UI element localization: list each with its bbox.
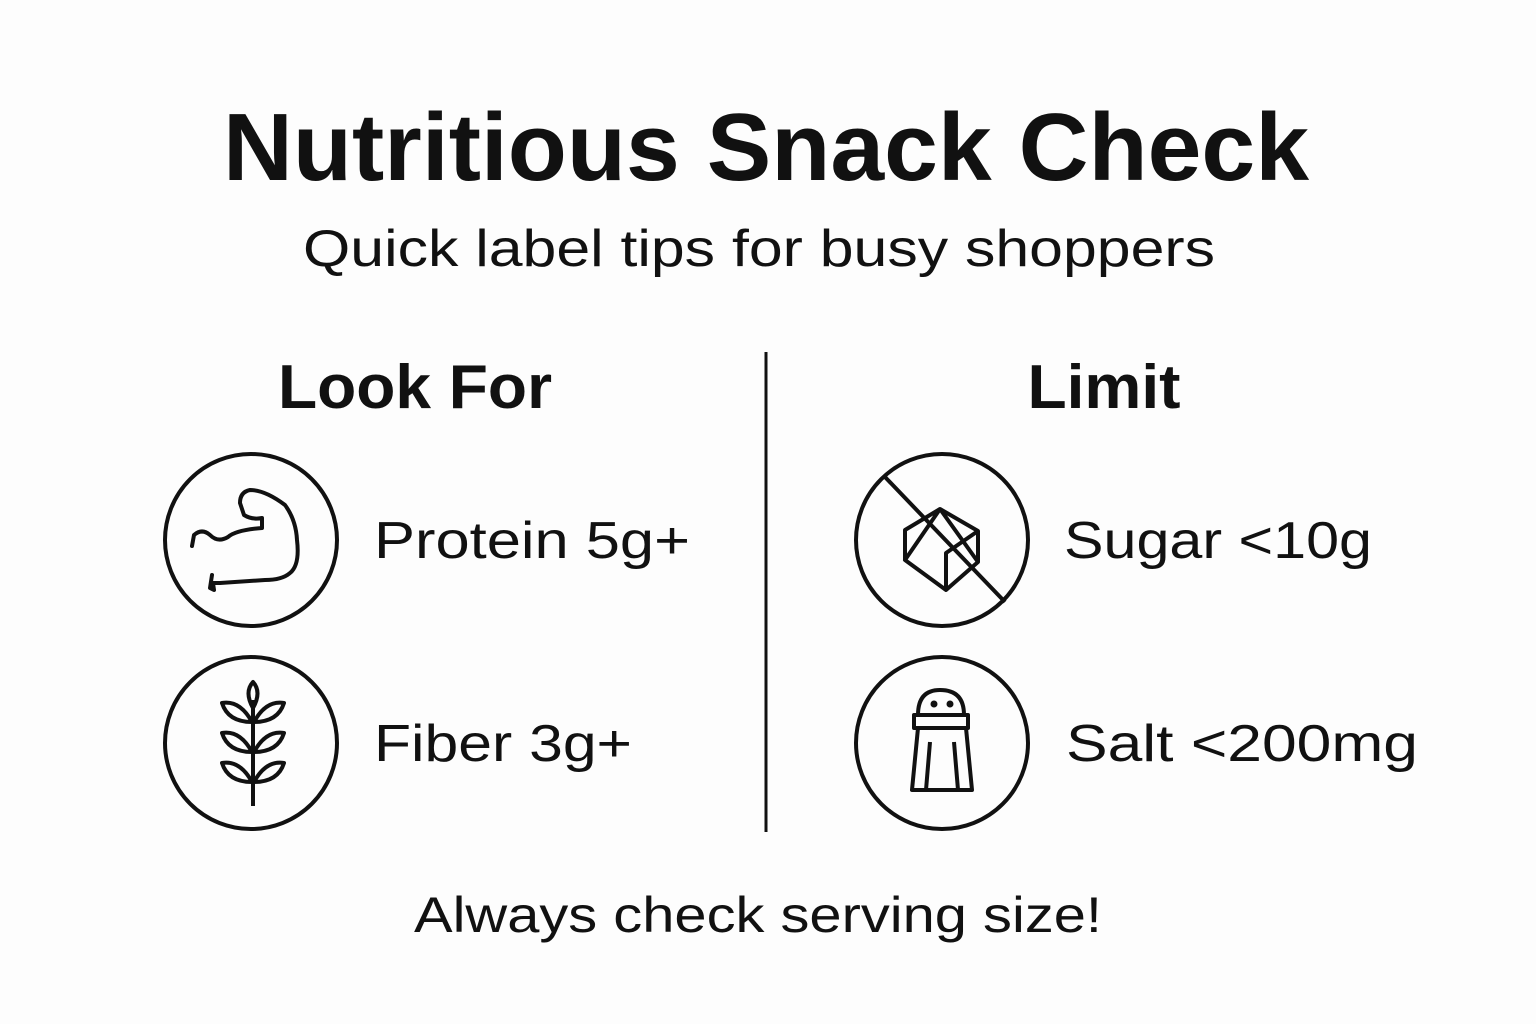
text: protein: Protein 5g+ (374, 512, 690, 570)
text: fiber: Fiber 3g+ (374, 715, 632, 773)
icon: no sugar cube (856, 454, 1028, 626)
subtitle: Quick label tips for busy shoppers (303, 220, 1215, 278)
icon: salt shaker (856, 657, 1028, 829)
heading: Limit: Limit (1028, 353, 1180, 422)
text: sugar: Sugar <10g (1064, 512, 1372, 570)
title: Nutritious Snack Check (223, 94, 1310, 201)
heading: Look For: Look For (278, 353, 552, 422)
icon: muscle arm (165, 454, 337, 626)
footer note: Always check serving size! (414, 887, 1102, 943)
text: salt: Salt <200mg (1066, 715, 1418, 773)
icon: wheat (165, 657, 337, 829)
